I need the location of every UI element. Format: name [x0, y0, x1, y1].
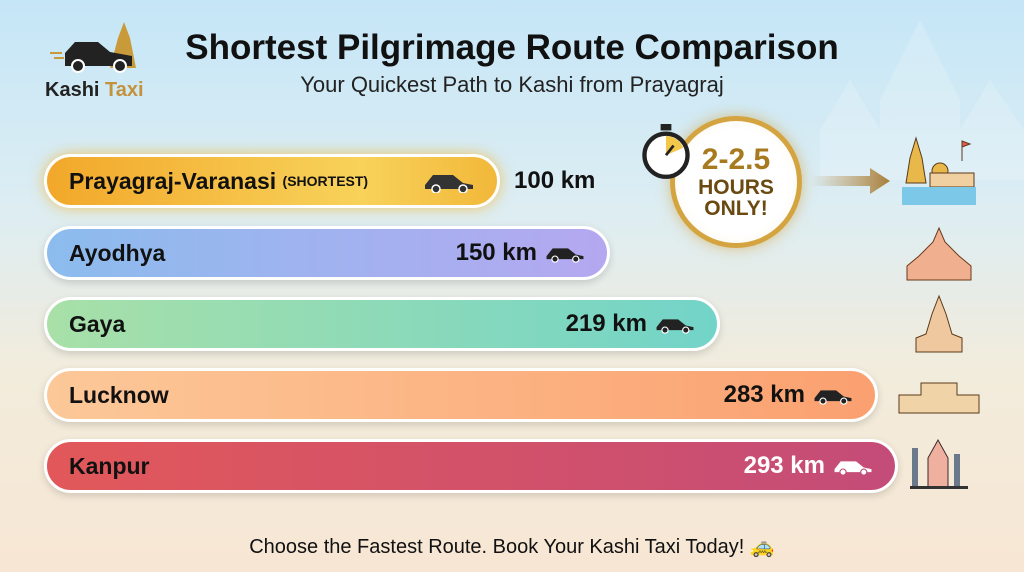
logo: Kashi Taxi	[45, 79, 144, 101]
logo	[45, 22, 144, 101]
subtitle: Your Quickest Path to Kashi from Prayagraj	[300, 72, 724, 97]
icon: stopwatch	[642, 124, 690, 179]
label 100 km: 100 km	[514, 167, 595, 194]
bar: Gaya: Gaya	[69, 310, 125, 336]
bar: Kanpur	[44, 439, 898, 493]
callout: 2-2.5 hours: ONLY!	[704, 197, 768, 220]
bar: Prayagraj-Varanasi: Prayagraj-Varanasi	[69, 168, 276, 194]
title: Shortest Pilgrimage Route Comparison	[185, 28, 839, 67]
bar: Kanpur: Kanpur	[69, 452, 150, 478]
bar: Ayodhya: Ayodhya	[69, 240, 165, 266]
icon: Lucknow building	[898, 382, 980, 414]
callout: 2-2.5 hours: HOURS	[698, 176, 774, 199]
bar: Gaya: 219 km	[566, 310, 647, 337]
bar: Lucknow: 283 km	[724, 381, 805, 408]
background temple silhouette	[892, 21, 948, 78]
bar: Kanpur: 293 km	[744, 452, 825, 479]
bar: Ayodhya: 150 km	[456, 239, 537, 266]
callout: 2-2.5 hours: 2-2.5	[702, 143, 770, 176]
bar: Prayagraj-Varanasi: (SHORTEST)	[283, 173, 368, 189]
bar: Lucknow	[44, 368, 878, 422]
icon: Varanasi ghat	[902, 136, 976, 205]
callout: 2-2.5 hours	[670, 116, 802, 248]
bar: Prayagraj-Varanasi	[44, 154, 500, 208]
bar: Lucknow: Lucknow	[69, 382, 169, 408]
icon: Ayodhya temple	[906, 226, 972, 280]
arrow	[814, 168, 890, 194]
icon: Kanpur industrial	[910, 439, 968, 489]
icon: Gaya temple	[916, 294, 962, 352]
bar: Gaya	[44, 297, 720, 351]
footer: Choose the Fastest Route. Book Your Kashi Taxi Today! 🚕	[249, 536, 775, 558]
bar: Ayodhya	[44, 226, 610, 280]
